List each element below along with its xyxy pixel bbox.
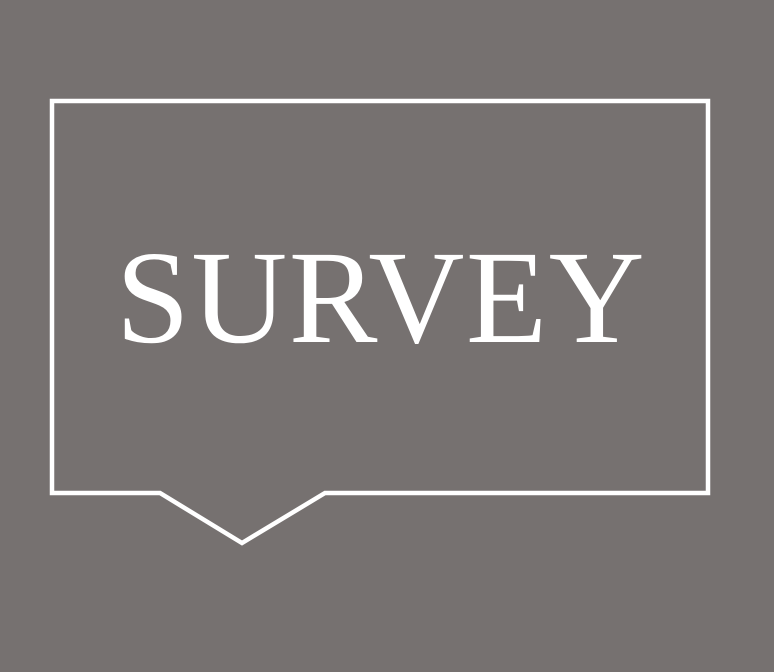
speech bubble outline: [52, 101, 708, 543]
title: SURVEY: SURVEY: [116, 223, 646, 371]
